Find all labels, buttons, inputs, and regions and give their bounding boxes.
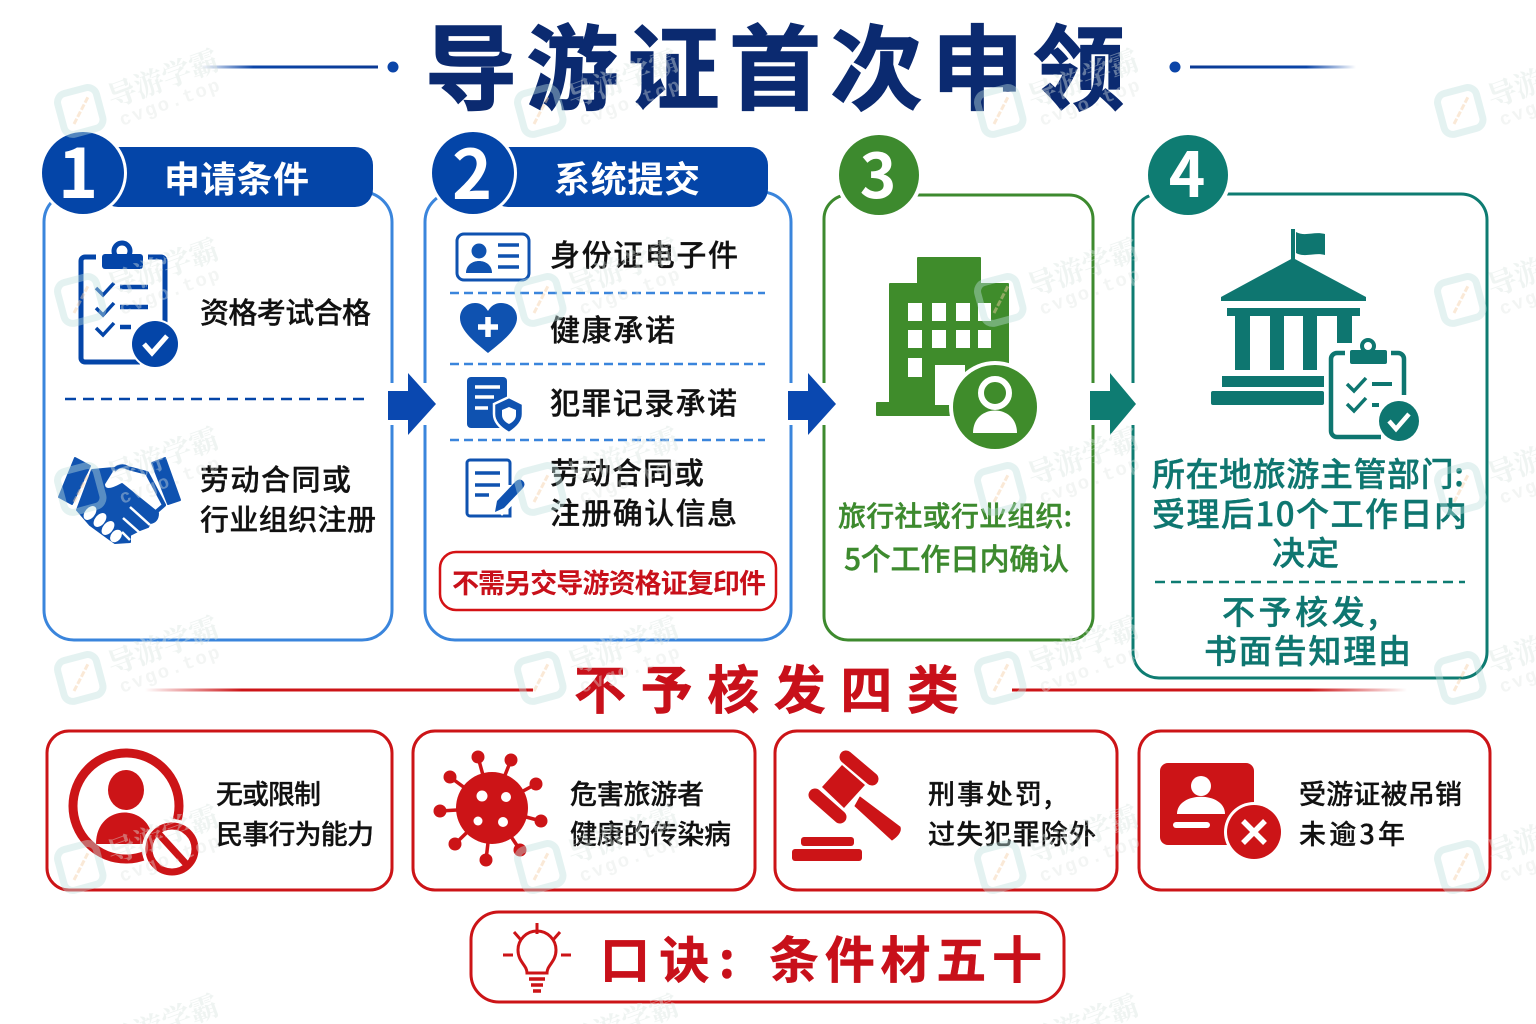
watermark layer: cvgo.top bbox=[1037, 641, 1145, 699]
watermark layer: cvgo.top bbox=[117, 452, 225, 510]
text: health pledge: 健康承诺 bbox=[550, 306, 675, 350]
text: mnemonic: 条件材五十 bbox=[769, 921, 1042, 993]
arrow 3 bbox=[1088, 373, 1138, 435]
card: no civil capacity bbox=[47, 731, 392, 890]
panel 3: travel agency confirmation bbox=[824, 126, 1093, 640]
watermark layer: 导游学霸 bbox=[101, 794, 224, 872]
watermark layer: cvgo.top bbox=[117, 74, 225, 132]
callout: no photocopy needed: 不需另交导游资格证复印件 bbox=[452, 562, 766, 601]
text bbox=[216, 773, 374, 852]
icon: government building with clipboard bbox=[1211, 229, 1421, 443]
watermark layer: cvgo.top bbox=[1037, 452, 1145, 510]
watermark layer: 导游学霸 bbox=[561, 38, 684, 116]
text: refusal in writing: 书面告知理由 bbox=[1204, 625, 1411, 673]
step 2 header: 系统提交 bbox=[554, 151, 700, 203]
card: criminal punishment bbox=[775, 731, 1117, 890]
icon: heart bbox=[460, 303, 517, 353]
text: 健康的传染病 bbox=[570, 813, 731, 852]
text: refusal in writing bbox=[1204, 586, 1411, 673]
arrow 2 bbox=[786, 373, 836, 435]
icon: clipboard with check bbox=[81, 243, 180, 369]
watermark layer: cvgo.top bbox=[577, 641, 685, 699]
step 3 badge: 3 bbox=[860, 126, 896, 216]
step 4 badge: 4 bbox=[1169, 125, 1205, 215]
watermark layer: cvgo.top bbox=[577, 263, 685, 321]
text: labor contract bbox=[200, 457, 376, 539]
watermark layer: 导游学霸 bbox=[1021, 794, 1144, 872]
icon: document with shield bbox=[467, 377, 523, 433]
text: labor contract confirmation: 劳动合同或 bbox=[550, 449, 704, 493]
step 3 badge bbox=[835, 126, 923, 219]
text: criminal record pledge: 犯罪记录承诺 bbox=[550, 379, 737, 423]
text: exam passed: 资格考试合格 bbox=[200, 290, 371, 332]
icon: person with prohibition sign bbox=[73, 753, 202, 879]
text bbox=[928, 773, 1096, 852]
watermark layer: 导游学霸 bbox=[561, 227, 684, 305]
watermark layer: 导游学霸 bbox=[561, 416, 684, 494]
step 1 header: 申请条件 bbox=[164, 151, 309, 203]
step 4 badge bbox=[1144, 125, 1232, 219]
watermark layer: 导游学霸 bbox=[561, 605, 684, 683]
step 1 header: 1 bbox=[58, 119, 98, 218]
watermark layer: 导游学霸 bbox=[1021, 605, 1144, 683]
watermark layer: cvgo.top bbox=[577, 74, 685, 132]
step 2 header bbox=[429, 120, 768, 219]
arrow 1 bbox=[386, 373, 436, 435]
watermark layer: 导游学霸 bbox=[101, 416, 224, 494]
watermark layer: cvgo.top bbox=[577, 830, 685, 888]
watermark layer: 导游学霸 bbox=[1021, 416, 1144, 494]
text: authority decision in 10 days: 所在地旅游主管部门: bbox=[1152, 448, 1464, 496]
watermark layer: cvgo.top bbox=[1037, 830, 1145, 888]
text: agency confirms in 5 days bbox=[838, 495, 1072, 579]
step 2 header: 2 bbox=[452, 120, 492, 219]
watermark layer: cvgo.top bbox=[1037, 263, 1145, 321]
icon: document with pen bbox=[467, 460, 524, 516]
icon: handshake bbox=[59, 458, 180, 545]
icon: virus bbox=[434, 750, 548, 866]
card: infectious disease bbox=[413, 731, 755, 890]
text: 过失犯罪除外 bbox=[928, 813, 1096, 852]
text: mnemonic: 口诀: bbox=[600, 921, 735, 993]
section heading: four refusal categories: 不予核发四类 bbox=[574, 649, 959, 724]
watermark layer: cvgo.top bbox=[117, 641, 225, 699]
watermark layer: 导游学霸 bbox=[1021, 38, 1144, 116]
mnemonic callout bbox=[471, 912, 1064, 1002]
text bbox=[1299, 773, 1462, 852]
text: 未逾3年 bbox=[1299, 813, 1405, 852]
text: authority decision in 10 days bbox=[1152, 448, 1467, 575]
title decoration right bbox=[1170, 62, 1356, 72]
title decoration left bbox=[200, 62, 398, 72]
text: 危害旅游者 bbox=[570, 773, 704, 812]
panel 2: system submission bbox=[425, 120, 791, 640]
text: labor contract confirmation: 注册确认信息 bbox=[550, 489, 737, 533]
watermark layer: 导游学霸 bbox=[101, 227, 224, 305]
text: 刑事处罚, bbox=[928, 773, 1052, 812]
watermark layer: cvgo.top bbox=[1037, 74, 1145, 132]
icon: office building with person bbox=[877, 258, 1041, 453]
text: authority decision in 10 days: 决定 bbox=[1272, 527, 1339, 575]
watermark layer: 导游学霸 bbox=[101, 38, 224, 116]
text: labor contract: 劳动合同或 bbox=[200, 457, 351, 499]
text: authority decision in 10 days: 受理后10个工作日内 bbox=[1152, 488, 1467, 536]
text: labor contract confirmation bbox=[550, 449, 737, 533]
text: 受游证被吊销 bbox=[1299, 773, 1462, 812]
watermark layer: 导游学霸 bbox=[561, 794, 684, 872]
text: mnemonic bbox=[600, 921, 1042, 993]
text: agency confirms in 5 days: 旅行社或行业组织: bbox=[838, 495, 1072, 535]
watermark layer: 导游学霸 bbox=[101, 605, 224, 683]
text: 民事行为能力 bbox=[216, 813, 374, 852]
text bbox=[570, 773, 731, 852]
text: labor contract: 行业组织注册 bbox=[200, 497, 376, 539]
icon: gavel bbox=[792, 757, 900, 861]
text: refusal in writing: 不予核发, bbox=[1222, 586, 1378, 634]
callout: no photocopy needed bbox=[440, 552, 776, 610]
text: 无或限制 bbox=[216, 773, 321, 812]
watermark layer: cvgo.top bbox=[577, 452, 685, 510]
watermark layer: cvgo.top bbox=[117, 830, 225, 888]
card: license revoked bbox=[1139, 731, 1490, 890]
panel 1: application conditions bbox=[39, 119, 392, 640]
panel 4: tourism authority decision bbox=[1133, 125, 1487, 678]
icon: revoked ID card bbox=[1160, 763, 1284, 862]
icon: id card bbox=[457, 234, 529, 280]
text: agency confirms in 5 days: 5个工作日内确认 bbox=[844, 535, 1069, 579]
watermark layer: cvgo.top bbox=[117, 263, 225, 321]
watermark layer: 导游学霸 bbox=[1021, 227, 1144, 305]
icon: light bulb bbox=[503, 923, 571, 991]
step 1 header bbox=[39, 119, 373, 218]
text: ID e-copy: 身份证电子件 bbox=[550, 231, 738, 275]
section heading: four refusal categories bbox=[145, 649, 1407, 724]
